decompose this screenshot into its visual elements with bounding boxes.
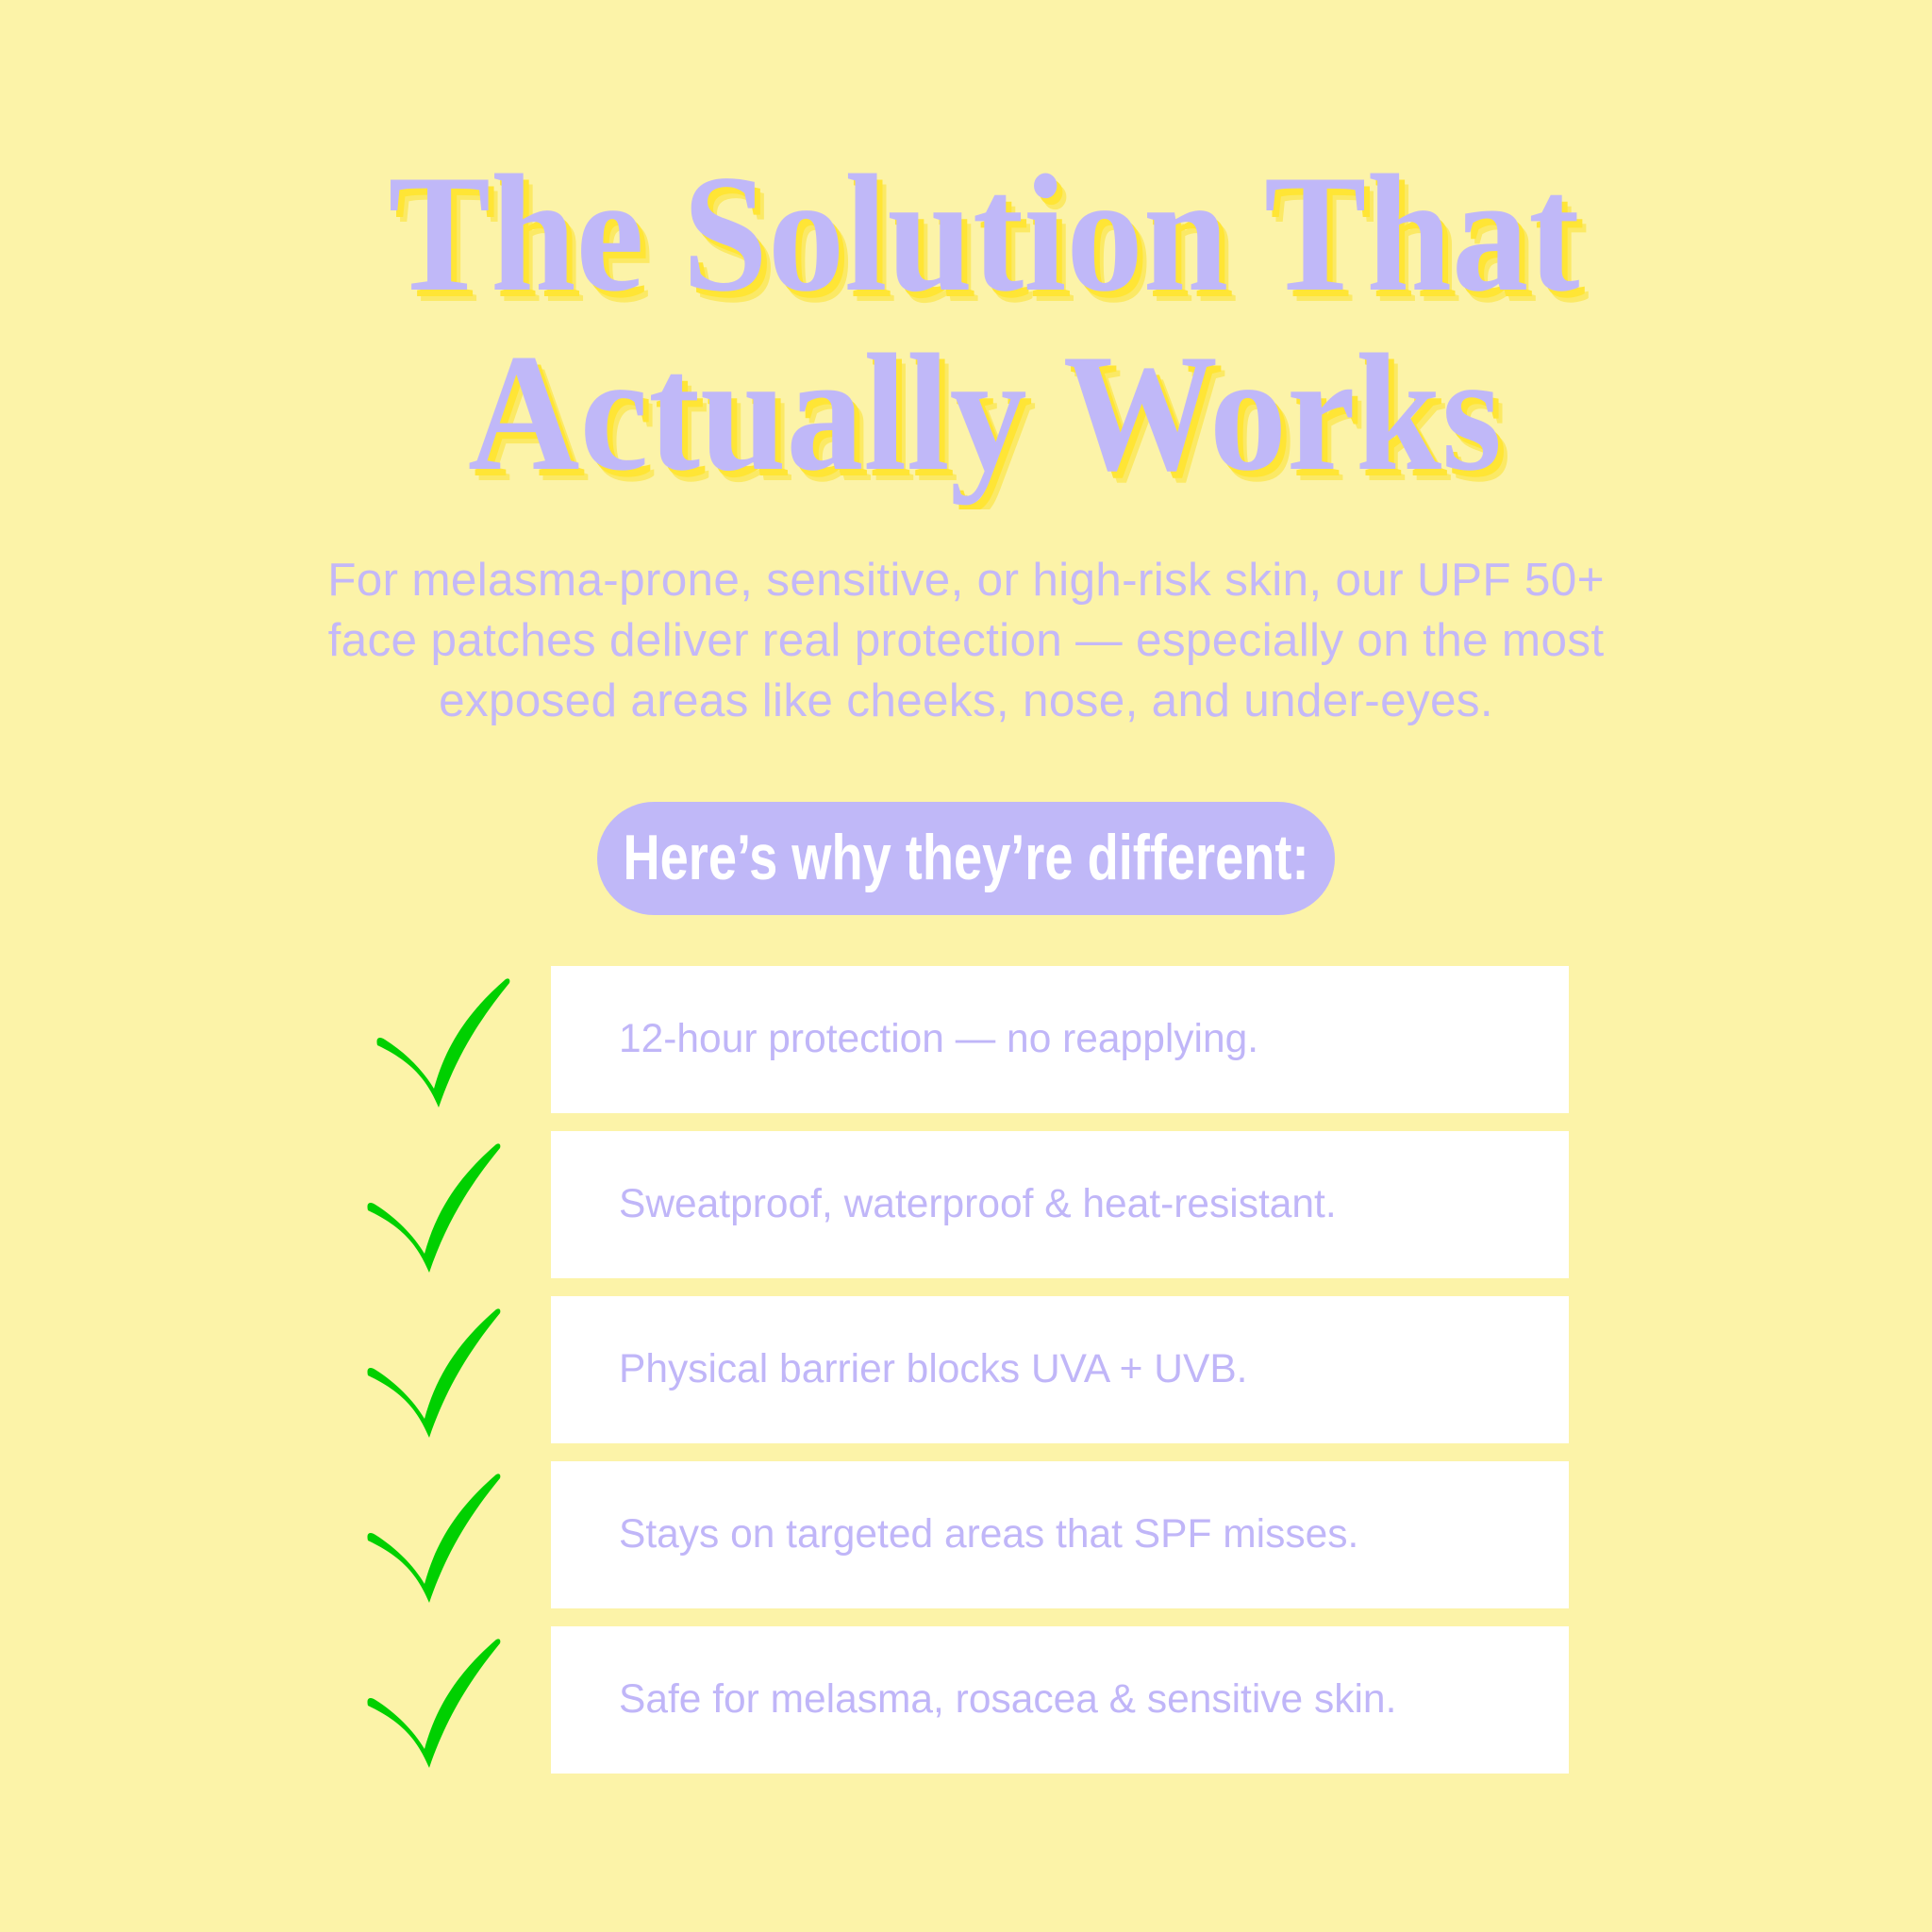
icon: check 2: [368, 1143, 500, 1273]
title: The Solution That: [394, 146, 1585, 333]
title: The Solution That: [398, 151, 1589, 338]
title: Actually Works: [468, 319, 1502, 506]
subtitle text: [327, 554, 1605, 726]
icon: check 4: [368, 1474, 500, 1603]
row 1: [551, 966, 1569, 1113]
row 1: 12-hour protection — no reapplying.: [619, 1017, 1258, 1061]
icon: check 3: [368, 1308, 500, 1438]
title: The Solution That: [389, 140, 1579, 326]
row 4: [551, 1461, 1569, 1608]
row 2: Sweatproof, waterproof & heat-resistant.: [619, 1182, 1337, 1226]
title: [389, 140, 1589, 509]
title: Actually Works: [474, 325, 1507, 509]
row 3: Physical barrier blocks UVA + UVB.: [619, 1347, 1247, 1391]
subtitle text: exposed areas like cheeks, nose, and under-eyes.: [439, 675, 1493, 726]
row 5: [551, 1626, 1569, 1774]
subtitle text: face patches deliver real protection — especially on the most: [328, 614, 1604, 666]
row 2: [551, 1131, 1569, 1278]
icon: check 5: [368, 1639, 500, 1768]
row 5: Safe for melasma, rosacea & sensitive skin.: [619, 1677, 1396, 1722]
subtitle text: For melasma-prone, sensitive, or high-risk skin, our UPF 50+: [327, 554, 1605, 606]
icon: check 1: [377, 978, 509, 1108]
row 3: [551, 1296, 1569, 1443]
row 4: Stays on targeted areas that SPF misses.: [619, 1512, 1358, 1557]
pill heading: [597, 802, 1335, 915]
